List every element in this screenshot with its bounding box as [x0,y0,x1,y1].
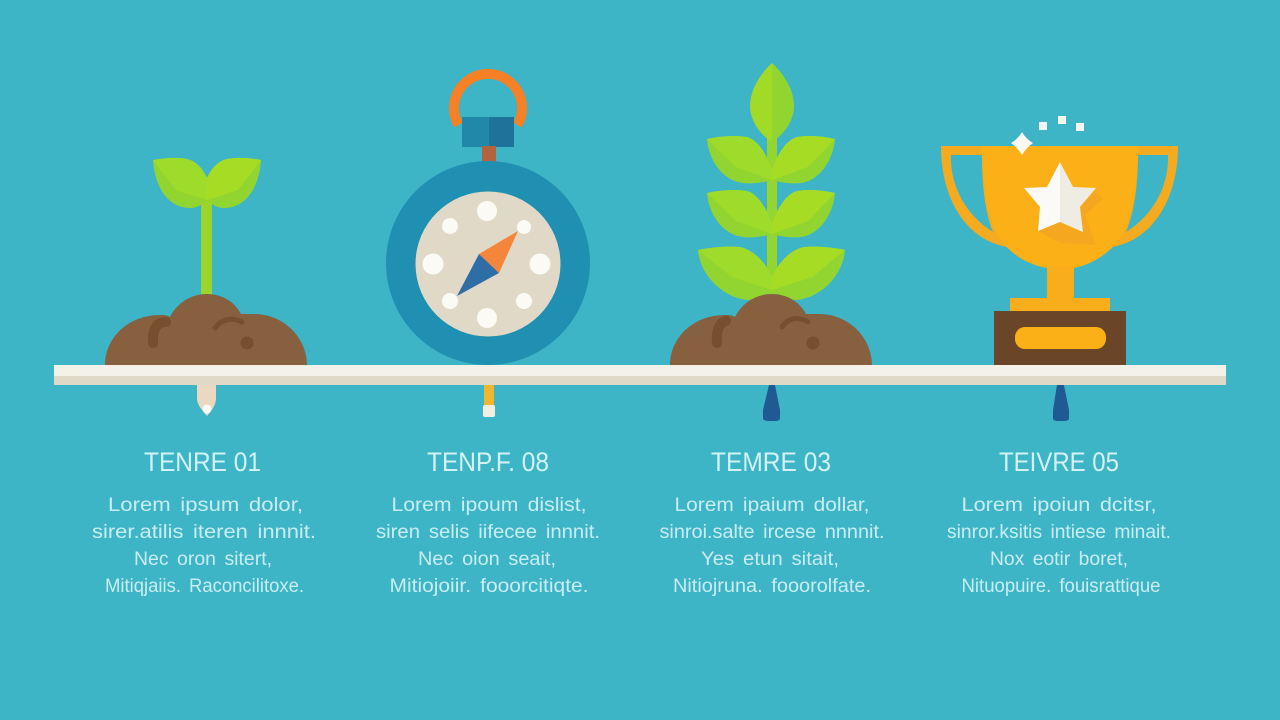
soil mound [670,294,872,365]
plant stem [767,135,777,305]
body: step 1: Mitiqjaiis. Raconcilitoxe. [105,576,304,597]
sprout right leaf [207,158,261,208]
soil marks [717,319,820,350]
marker peg 4 [1053,385,1069,421]
heading: step 3: TEMRE 03 [711,447,831,477]
right handle [1112,146,1178,247]
body: step 1 [92,495,316,597]
outer case [386,161,590,365]
icon: grown plant in soil [670,63,872,365]
dial dots [422,201,550,328]
text block: step 2 [376,447,600,597]
body: step 3: Nitiojruna. fooorolfate. [673,576,871,597]
text block: step 4 [947,447,1171,597]
middle leaf pair [707,190,835,237]
soil marks [153,319,254,350]
body: step 4: Nituopuire. fouisrattique [962,576,1160,597]
icon: compass stopwatch [386,74,590,365]
body: step 4: Lorem ipoiun dcitsr, [962,495,1156,516]
star shadow [1038,190,1103,245]
body: step 1: Lorem ipsum dolor, [108,495,303,516]
top leaf [750,63,794,142]
body: step 4: sinror.ksitis intiese minait. [947,522,1171,543]
dial face [416,192,560,336]
body: step 2: Lorem ipoum dislist, [392,495,586,516]
trophy stem [1047,266,1074,300]
heading: step 2: TENP.F. 08 [427,447,549,477]
heading: step 1: TENRE 01 [144,447,261,477]
left handle [941,146,1007,247]
neck [482,146,496,163]
marker peg 1 [197,385,216,416]
plinth label [1015,327,1106,349]
body: step 3: sinroi.salte ircese nnnnit. [660,522,884,543]
timeline shelf [54,365,1226,385]
soil mound [105,294,307,365]
body: step 2 [376,495,600,597]
body: step 2: Nec oion seait, [418,549,556,570]
plinth [994,311,1126,365]
orange ring handle [454,74,522,125]
upper leaf pair [707,136,835,183]
body: step 1: Nec oron sitert, [134,549,272,570]
icon: trophy [941,116,1178,365]
body: step 4 [947,495,1171,597]
body: step 2: Mitiojoiir. fooorcitiqte. [390,576,588,597]
confetti dots [1039,116,1084,131]
icon: sprout in soil [105,158,307,365]
body: step 4: Nox eotir boret, [990,549,1128,570]
lower leaf pair [698,247,845,300]
crown [462,117,514,147]
star [1024,162,1096,232]
body: step 3: Lorem ipaium dollar, [674,495,870,516]
sparkle [1011,132,1033,155]
marker peg 2 [483,385,495,417]
body: step 3 [660,495,884,597]
text block: step 3 [660,447,884,597]
body: step 3: Yes etun sitait, [701,549,839,570]
sprout left leaf [153,158,207,208]
sprout stem [201,200,212,296]
body: step 1: sirer.atilis iteren innnit. [92,522,316,543]
compass needle [457,231,518,296]
body: step 2: siren selis iifecee innnit. [376,522,600,543]
base plate [1010,298,1110,312]
cup [982,146,1138,268]
text block: step 1 [92,447,316,597]
marker peg 3 [763,385,780,421]
heading: step 4: TEIVRE 05 [999,447,1119,477]
